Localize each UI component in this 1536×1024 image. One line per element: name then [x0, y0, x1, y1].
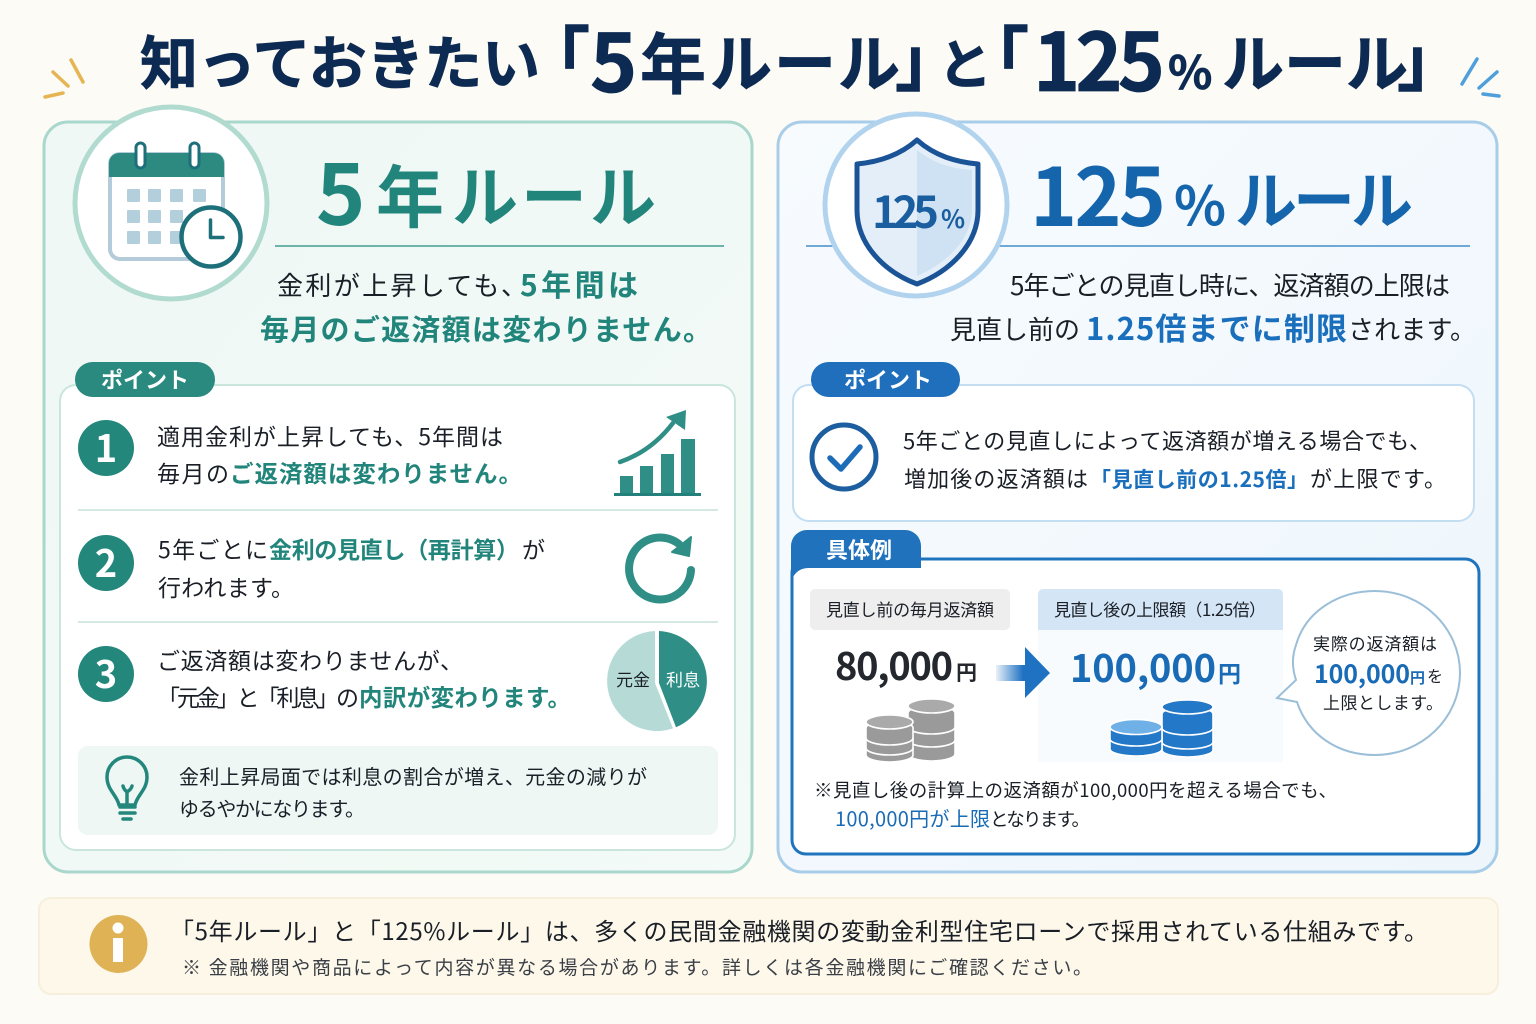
icon: blue coins: [1110, 700, 1213, 757]
footer note: ※ 金融機関や商品によって内容が異なる場合があります。詳しくは各金融機関にご確認ください。: [182, 953, 1092, 980]
chart: principal and interest pie: 利息: [666, 666, 700, 691]
heading: 5年ルール: ルール: [452, 145, 656, 241]
point 1: 適用金利が上昇しても、5年間は: [157, 418, 503, 452]
point 1: 1: [95, 418, 117, 473]
lead text: [260, 261, 712, 349]
after amount: 100,000: [1070, 638, 1216, 693]
example note: となります。: [990, 806, 1090, 832]
callout bubble: を: [1427, 663, 1443, 687]
icon: check circle: [812, 425, 876, 489]
lead text: [950, 266, 1476, 349]
icon: cycle arrow: [629, 537, 691, 600]
lead text: 毎月のご返済額は変わりません。: [260, 307, 712, 349]
badge: ポイント: ポイント: [844, 363, 932, 395]
point 2: 金利の見直し（再計算）: [269, 531, 519, 565]
icon: light bulb: [107, 757, 147, 819]
tip box: [78, 746, 718, 835]
title: %: [1168, 37, 1212, 103]
title: 年: [640, 12, 706, 108]
point 2: 2: [95, 533, 117, 588]
title: 」: [895, 6, 963, 105]
chart: principal and interest pie: 元金: [616, 666, 650, 691]
after amount: 見直し後の上限額（1.25倍）: [1054, 596, 1266, 621]
lead text: 5年ごとの見直し時に、返済額の上限は: [1010, 266, 1450, 303]
point 2: 行われます。: [158, 569, 294, 603]
point card: が上限です。: [1310, 462, 1446, 494]
point card: 5年ごとの見直しによって返済額が増える場合でも、: [903, 424, 1431, 456]
heading: 5年ルール: 5: [316, 129, 366, 250]
icon: info: [90, 915, 148, 973]
point 3: 3: [95, 644, 117, 699]
heading: 5年ルール: 年: [376, 143, 444, 242]
callout bubble: 実際の返済額は: [1313, 630, 1437, 655]
title: ルール: [1222, 14, 1408, 104]
point 3: 内訳が変わります。: [359, 679, 571, 713]
title: 125: [1033, 0, 1165, 115]
callout bubble: 100,000: [1314, 655, 1410, 691]
after amount: [1038, 589, 1283, 762]
tab: 具体例: [791, 530, 921, 585]
arrow: [996, 647, 1050, 698]
example note: [814, 777, 1337, 832]
example box: [791, 530, 1479, 854]
title: と: [938, 21, 992, 100]
chart: principal and interest pie: [607, 631, 707, 731]
before amount: [810, 589, 1010, 762]
point 1: ご返済額は変わりません。: [230, 455, 522, 489]
example note: ※見直し後の計算上の返済額が100,000円を超える場合でも、: [814, 777, 1337, 803]
badge: ポイント: [811, 362, 960, 397]
title: 」: [1397, 6, 1465, 105]
title: 知っておきたい: [140, 17, 540, 101]
point 1: 毎月の: [157, 455, 229, 489]
after amount: 円: [1218, 655, 1241, 689]
title: 5: [590, 0, 637, 116]
heading rule line: [806, 245, 1470, 247]
lead text: されます。: [1348, 310, 1476, 347]
footer note: 「5年ルール」と「125%ルール」は、多くの民間金融機関の変動金利型住宅ローンで採用されている仕組みです。: [170, 912, 1428, 947]
heading: 125％ルール: [1030, 134, 1413, 250]
point 3: ご返済額は変わりませんが、: [157, 642, 463, 676]
points card: [60, 362, 735, 850]
badge: ポイント: [75, 362, 215, 397]
icon: rising bar chart: [614, 410, 701, 496]
tip box: 金利上昇局面では利息の割合が増え、元金の減りが: [179, 761, 647, 790]
point card: [793, 362, 1474, 521]
icon: left sparkle: [45, 60, 83, 97]
icon: 125% shield: 125: [872, 177, 939, 241]
lead text: 金利が上昇しても、: [277, 266, 527, 303]
tip box: ゆるやかになります。: [179, 793, 365, 822]
point 2: 5年ごとに: [158, 531, 268, 565]
point 2: [78, 531, 545, 603]
icon: gray coins: [866, 699, 955, 762]
title: ルール: [710, 14, 900, 104]
heading: 5年ルール: [316, 129, 656, 250]
panel: 5 year rule: [44, 107, 752, 872]
panel: 125 percent rule: [778, 114, 1497, 872]
point card: 増加後の返済額は: [904, 462, 1088, 494]
point 3: [78, 642, 571, 713]
tab: 具体例: 具体例: [826, 533, 892, 565]
icon: 125% shield: %: [941, 200, 965, 236]
point card: 「見直し前の1.25倍」: [1090, 464, 1308, 494]
before amount: 80,000: [835, 636, 953, 691]
heading rule line: [275, 245, 724, 247]
heading: 125％ルール: 125: [1030, 134, 1166, 250]
lead text: 見直し前の: [950, 310, 1080, 347]
point 2: が: [522, 531, 545, 565]
icon: calendar with clock: [75, 107, 267, 299]
badge: ポイント: ポイント: [101, 363, 189, 395]
title: [140, 0, 1465, 116]
icon: 125% shield: [825, 114, 1007, 296]
before amount: 円: [956, 657, 977, 687]
lead text: 1.25倍までに制限: [1086, 304, 1347, 349]
lead text: 5年間は: [520, 261, 638, 305]
title: 「: [961, 4, 1029, 103]
point 3: 「元金」と「利息」の: [157, 679, 359, 713]
heading: 125％ルール: ルール: [1235, 151, 1413, 241]
title: 「: [522, 4, 590, 103]
callout bubble: [1277, 591, 1460, 755]
callout bubble: 上限とします。: [1323, 689, 1443, 714]
before amount: 見直し前の毎月返済額: [826, 596, 994, 621]
icon: right sparkle: [1462, 59, 1499, 96]
footer note: [39, 898, 1498, 994]
callout bubble: 円: [1410, 667, 1425, 688]
example note: 100,000円が上限: [835, 803, 990, 832]
heading: 125％ルール: %: [1174, 162, 1226, 241]
point 1: [78, 418, 522, 489]
